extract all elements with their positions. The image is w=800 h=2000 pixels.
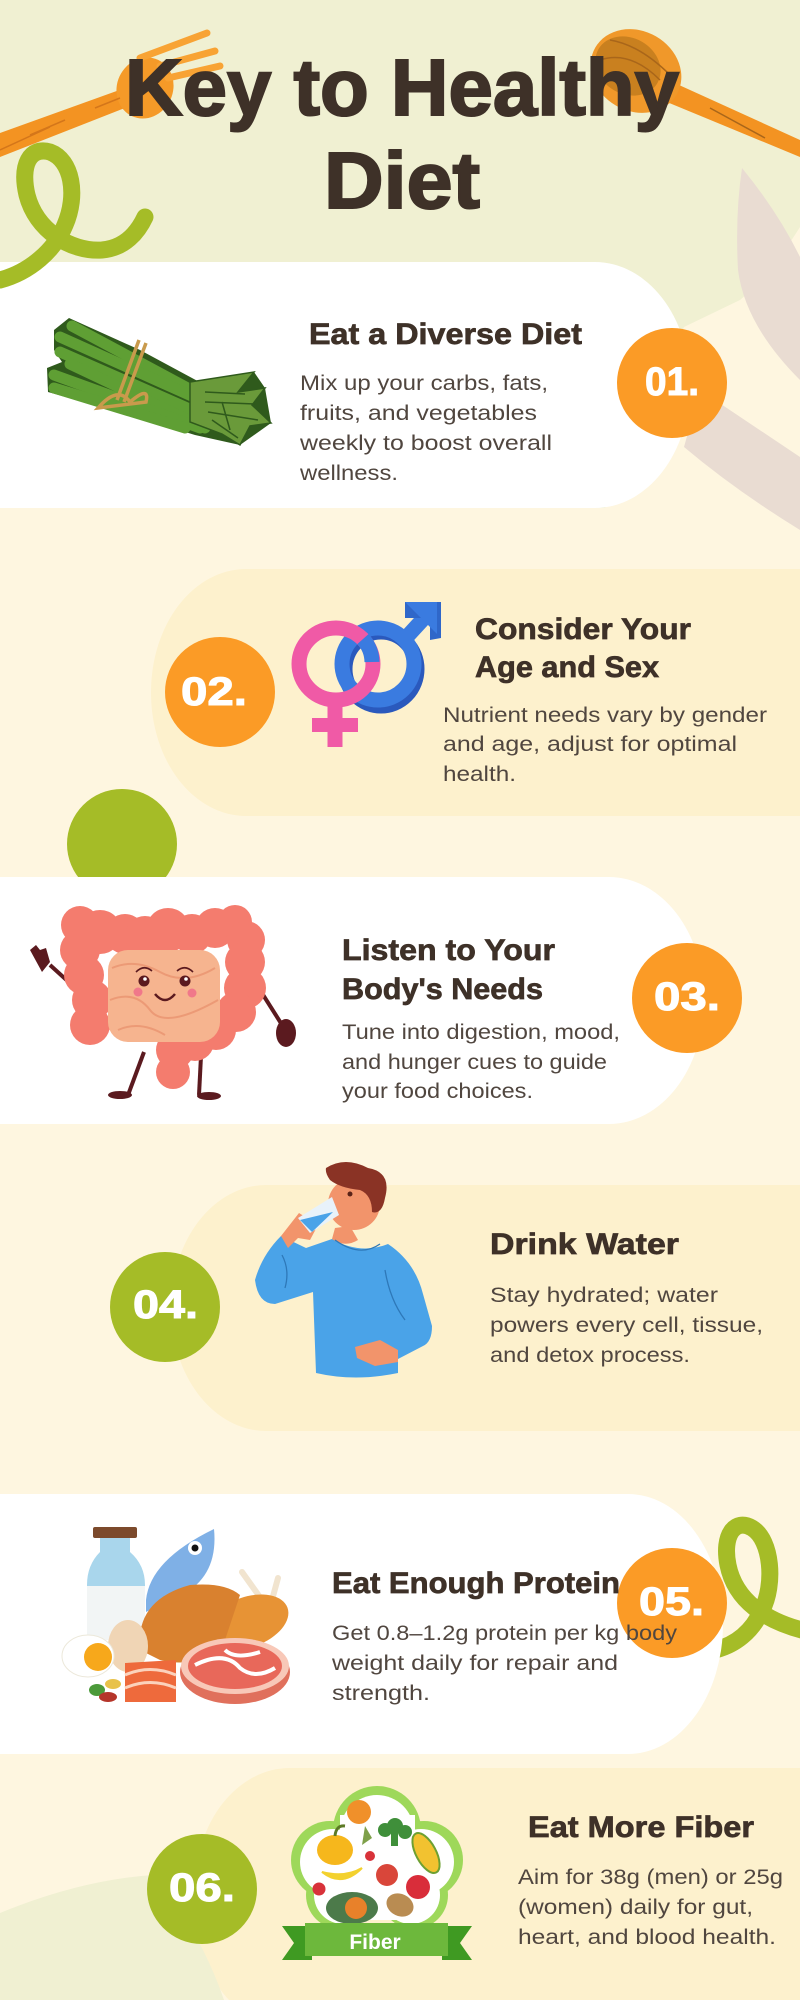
number badge 02 [165, 637, 275, 747]
heading: Eat More Fiber [528, 1811, 754, 1844]
body text: health. [443, 763, 516, 786]
number badge 06: 06. [169, 1866, 235, 1910]
body text [299, 372, 552, 485]
heading: Listen to Your [342, 934, 555, 967]
title [125, 43, 680, 225]
number badge 04: 04. [133, 1283, 198, 1327]
heading: Eat a Diverse Diet [309, 318, 582, 351]
body text: strength. [332, 1682, 430, 1705]
body text: fruits, and vegetables [300, 402, 537, 425]
body text: Get 0.8–1.2g protein per kg body [332, 1622, 678, 1645]
number badge 05 [617, 1548, 727, 1658]
title: Diet [324, 136, 480, 225]
ribbon banner [282, 1923, 472, 1960]
body text: heart, and blood health. [518, 1926, 776, 1949]
icon: fork [0, 33, 220, 157]
icon: gender symbols [299, 602, 441, 747]
heading: Consider Your [475, 613, 691, 646]
panel: 02 consider your age and sex [151, 569, 800, 816]
heading [342, 934, 555, 1006]
body text [518, 1866, 783, 1949]
number badge 01 [617, 328, 727, 438]
body text [331, 1622, 678, 1705]
decorative green circle [67, 789, 177, 899]
body text [443, 704, 767, 786]
body text: and age, adjust for optimal [443, 733, 737, 756]
icon: asparagus [47, 318, 271, 445]
icon: protein foods [62, 1527, 296, 1704]
panel: 05 eat enough protein [0, 1494, 727, 1754]
number badge 05: 05. [639, 1580, 704, 1624]
body text: Mix up your carbs, fats, [300, 372, 548, 395]
body text: (women) daily for gut, [518, 1896, 753, 1919]
number badge 04 [110, 1252, 220, 1362]
icon: fiber foods badge [282, 1786, 472, 1960]
decorative corner blob [0, 1875, 224, 2000]
body text: wellness. [299, 462, 398, 485]
number badge 03 [632, 943, 742, 1053]
number badge 01: 01. [645, 360, 699, 404]
icon: spoon [575, 13, 800, 157]
panel: 04 drink water [110, 1162, 800, 1431]
panel: 01 eat a diverse diet [0, 262, 727, 508]
body text: Aim for 38g (men) or 25g [518, 1866, 783, 1889]
heading: Age and Sex [475, 651, 659, 684]
title: Key to Healthy [125, 43, 680, 132]
panel: 03 listen to your body's needs [0, 877, 742, 1124]
heading: Drink Water [490, 1228, 679, 1261]
body text: Tune into digestion, mood, [342, 1021, 620, 1044]
body text: weekly to boost overall [299, 432, 552, 455]
number badge 06 [147, 1834, 257, 1944]
heading: Eat Enough Protein [332, 1567, 620, 1600]
icon: man drinking water [255, 1162, 432, 1378]
heading: Body's Needs [342, 973, 543, 1006]
body text: Stay hydrated; water [490, 1284, 718, 1307]
decorative pink leaves [684, 168, 800, 530]
body text: powers every cell, tissue, [490, 1314, 763, 1337]
number badge 03: 03. [654, 975, 720, 1019]
body text: and detox process. [490, 1344, 690, 1367]
body text [490, 1284, 763, 1367]
body text: and hunger cues to guide [342, 1051, 607, 1074]
body text [342, 1021, 620, 1103]
body text: weight daily for repair and [331, 1652, 618, 1675]
body text: Nutrient needs vary by gender [443, 704, 767, 727]
icon: green squiggle [0, 151, 145, 280]
icon: intestine character [30, 905, 296, 1100]
icon: green squiggle right [715, 1525, 800, 1650]
ribbon banner: Fiber [349, 1931, 401, 1954]
panel: 06 eat more fiber [0, 1768, 800, 2000]
heading [475, 613, 691, 684]
number badge 02: 02. [181, 670, 247, 714]
body text: your food choices. [342, 1080, 533, 1103]
